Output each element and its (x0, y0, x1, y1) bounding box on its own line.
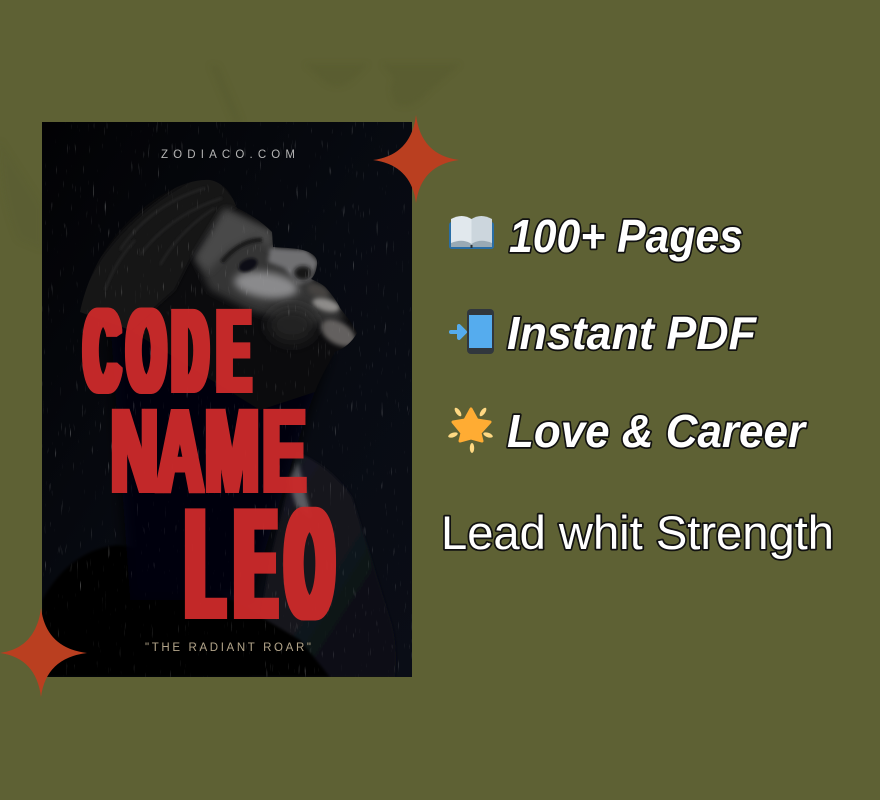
neck shadow (124, 354, 320, 600)
sparkle bottom left (0, 608, 87, 697)
subtitle: "THE RADIANT ROAR" (145, 642, 311, 654)
nostril shadow (294, 266, 312, 280)
eye (238, 257, 258, 274)
sparkle top right (373, 115, 459, 203)
feature: 100+ Pages (449, 210, 743, 262)
label: 100+ Pages: 100+ Pages (509, 210, 743, 262)
chin beard (318, 318, 356, 348)
cheek beard (268, 307, 316, 343)
upper-lip beard (308, 283, 329, 297)
lit cheek (233, 268, 299, 302)
dark body shadow (42, 545, 330, 677)
title line LEO: LEO (187, 477, 333, 650)
head (80, 180, 356, 410)
shoulder (264, 456, 372, 657)
label: Love & Career: Love & Career (507, 405, 807, 457)
poster artwork: man looking up (42, 122, 412, 677)
scratches (42, 122, 412, 677)
hair strands (105, 188, 222, 290)
icon: glowing star (448, 407, 493, 453)
icon: phone with arrow (451, 309, 494, 354)
faint background leaves (0, 64, 460, 250)
brow shadow (222, 240, 262, 262)
title line NAME: NAME (111, 386, 306, 518)
infographic canvas (0, 116, 833, 696)
tagline: Lead whit Strength (441, 506, 834, 559)
hair (80, 180, 236, 328)
feature: Love & Career (448, 405, 807, 457)
collar highlight (288, 462, 311, 508)
icon: open book (449, 216, 494, 249)
title: CODE NAME LEO (85, 286, 333, 650)
title line CODE: CODE (85, 286, 249, 418)
head base (143, 328, 323, 410)
lips (311, 296, 341, 314)
lit nose (268, 248, 318, 284)
site name: ZODIACO.COM (161, 149, 295, 161)
poster background (42, 122, 412, 677)
label: Instant PDF: Instant PDF (507, 307, 758, 359)
lit forehead (195, 210, 272, 272)
feature: Instant PDF (451, 307, 758, 359)
face midtone (195, 208, 345, 325)
poster (42, 122, 412, 677)
